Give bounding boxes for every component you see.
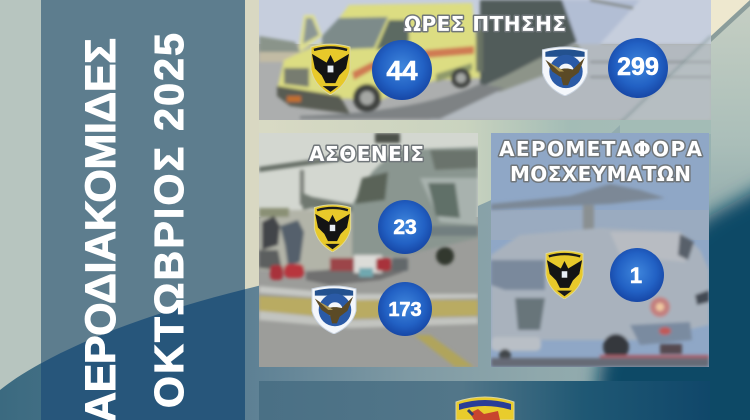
icon: army aviation badge xyxy=(546,251,583,299)
value: air force flight hours: 299 xyxy=(617,53,659,81)
value: army patients: 23 xyxy=(393,216,417,239)
heading: patients: ΑΣΘΕΝΕΙΣ xyxy=(309,142,424,166)
value: army flight hours xyxy=(372,40,432,100)
title: vertical heading: ΑΕΡΟΔΙΑΚΟΜΙΔΕΣ xyxy=(77,38,125,420)
icon: air force badge xyxy=(312,286,356,334)
panel: flight hours xyxy=(259,0,711,125)
title: vertical heading xyxy=(77,33,192,420)
value: army patients xyxy=(378,200,432,254)
value: air force patients xyxy=(378,282,432,336)
icon: army aviation badge xyxy=(311,44,350,95)
photo: naval helicopter xyxy=(491,133,709,367)
panel: vaccine airlift xyxy=(491,133,709,367)
icon: army aviation badge xyxy=(314,205,351,252)
side panel xyxy=(41,0,245,420)
heading: flight hours: ΩΡΕΣ ΠΤΗΣΗΣ xyxy=(404,12,566,36)
heading: vaccine airlift: ΑΕΡΟΜΕΤΑΦΟΡΑ xyxy=(499,137,703,161)
icon: unit badge xyxy=(456,397,514,420)
heading: vaccine airlift: ΜΟΣΧΕΥΜΑΤΩΝ xyxy=(510,162,691,186)
value: air force patients: 173 xyxy=(388,299,422,321)
title: vertical heading: ΟΚΤΩΒΡΙΟΣ 2025 xyxy=(146,33,192,408)
photo: ambulance and aircraft xyxy=(259,0,711,125)
photo: patients and helicopter xyxy=(259,133,478,367)
value: vaccine airlifts xyxy=(610,248,664,302)
value: vaccine airlifts: 1 xyxy=(630,263,642,288)
icon: air force badge xyxy=(542,47,588,96)
panel: patients xyxy=(259,133,478,367)
value: army flight hours: 44 xyxy=(386,55,418,86)
panel: bottom xyxy=(259,381,710,420)
value: air force flight hours xyxy=(608,38,668,98)
heading: vaccine airlift xyxy=(499,137,703,186)
